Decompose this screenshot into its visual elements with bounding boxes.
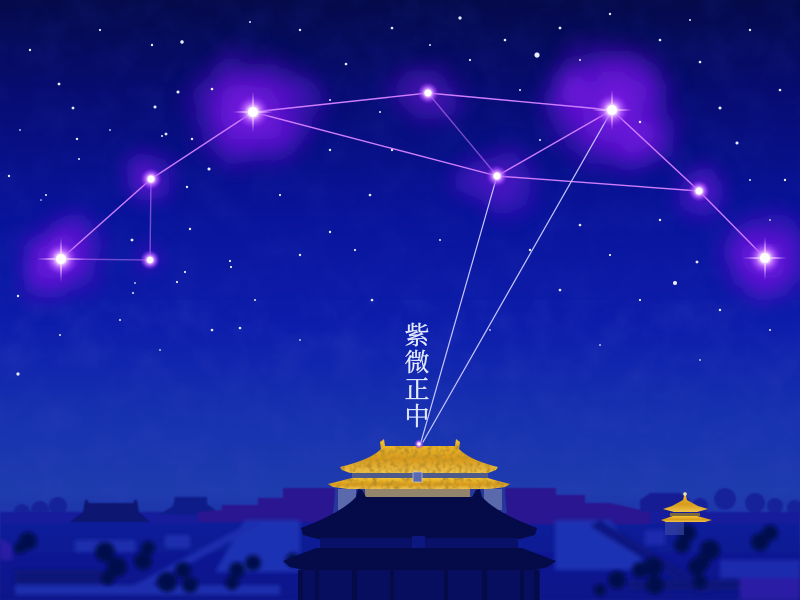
distant city skyline [0, 488, 800, 600]
star 6 [592, 90, 632, 130]
roof texture [328, 439, 510, 489]
star 2 [140, 168, 162, 190]
light beams to palace [421, 110, 612, 442]
columns [298, 570, 539, 600]
vertical title: 正 [404, 377, 430, 404]
lower dark roof [283, 548, 556, 571]
plaque [413, 472, 422, 482]
star 5 [417, 82, 439, 104]
vertical title: 中 [404, 403, 430, 431]
purple walls left and right [198, 488, 335, 522]
star 1 [233, 92, 273, 132]
hall body [333, 489, 507, 513]
constellation lines [61, 93, 765, 260]
upper golden roof [340, 439, 498, 473]
middle band [320, 538, 518, 550]
golden main hall [328, 439, 510, 513]
terraces and courtyards [0, 520, 800, 600]
star 9 [743, 237, 787, 280]
hall ground floor [298, 570, 540, 600]
vertical title: 紫 [404, 322, 430, 350]
dark foreground hall [283, 489, 556, 600]
dark trees [14, 524, 778, 596]
star 7 [486, 165, 508, 187]
bright constellation stars [37, 82, 787, 282]
star 4 [140, 250, 160, 270]
left hall [70, 500, 150, 522]
far trees [14, 488, 800, 520]
background star field [8, 13, 786, 376]
star 8 [688, 180, 710, 202]
vertical title [404, 322, 430, 431]
beam origin glow [414, 439, 424, 449]
vertical title: 微 [404, 349, 430, 377]
lower golden roof [328, 478, 510, 489]
purple nebula glows [9, 34, 800, 311]
star 3 [37, 238, 85, 282]
upper dark roof [301, 489, 537, 539]
small golden pagoda [661, 492, 712, 535]
